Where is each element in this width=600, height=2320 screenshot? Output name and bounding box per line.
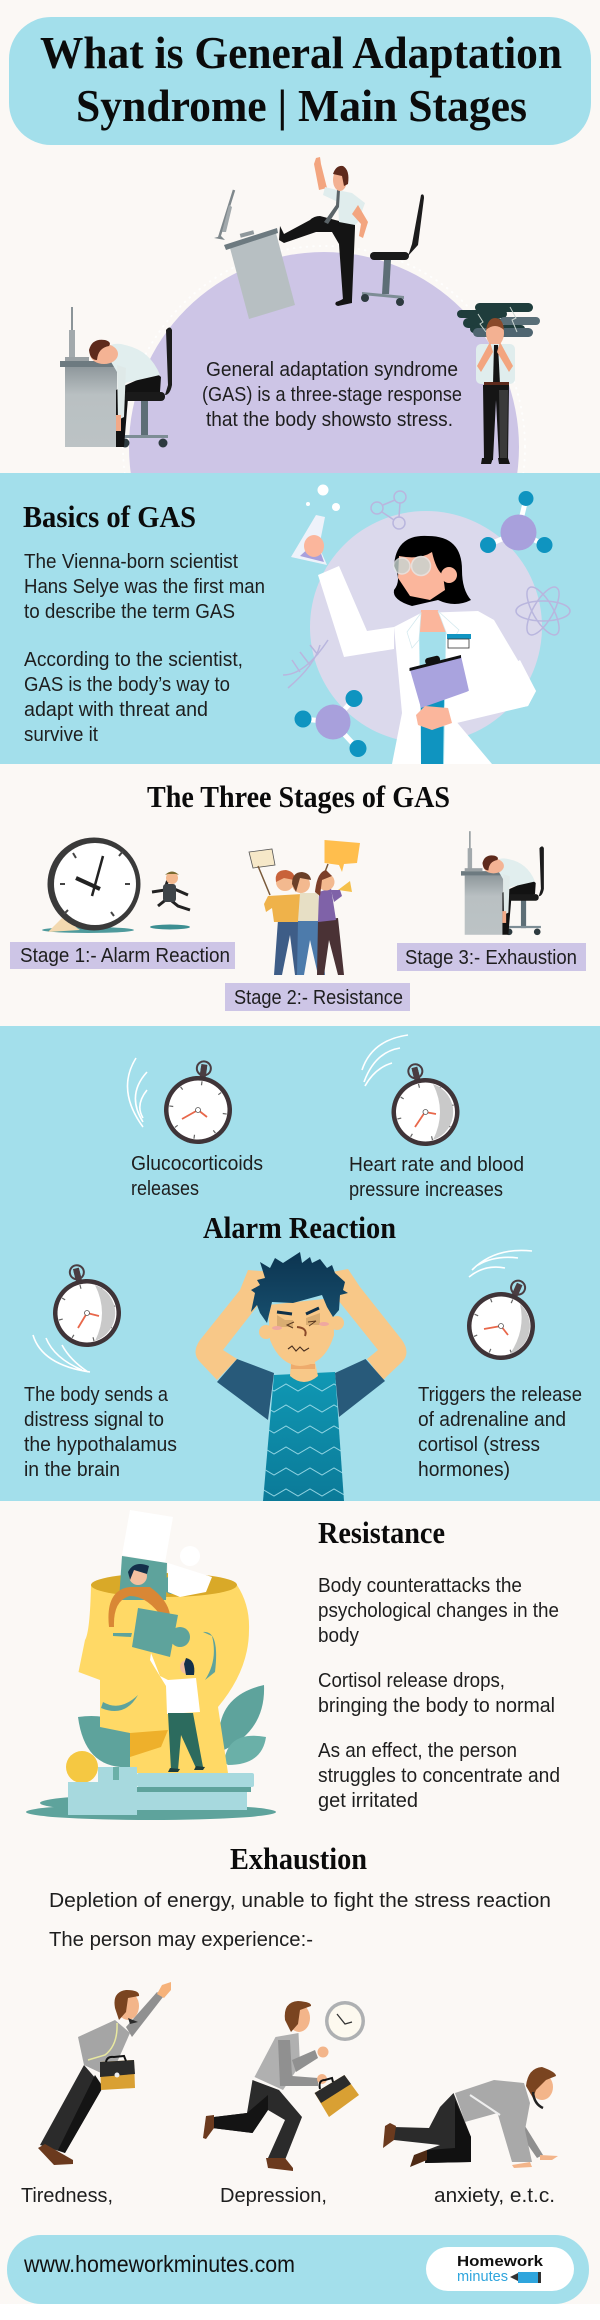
panel: alarm reaction: [0, 1026, 600, 1501]
text: glucocorticoids: releases: [131, 1177, 199, 1200]
logo: minutes: [457, 2268, 508, 2285]
labels: symptoms: anxiety, e.t.c.: [434, 2184, 555, 2207]
illustration: puzzle head: [26, 1510, 276, 1820]
illustration: stressed boy: [196, 1252, 406, 1501]
basics text: The Vienna-born scientist: [24, 550, 238, 573]
text: adrenaline: [418, 1383, 582, 1481]
intro text: [202, 358, 462, 431]
panel: intro: [60, 157, 540, 473]
illustration: exhausted at desk: [461, 831, 544, 935]
text: distress signal: in the brain: [24, 1458, 120, 1481]
heading: resistance: Resistance: [318, 1515, 445, 1550]
logo: [426, 2247, 574, 2291]
resistance text: Body counterattacks the: [318, 1574, 522, 1597]
labels: symptoms: [21, 2184, 555, 2207]
purple semicircle: [129, 252, 519, 473]
text: heart rate: pressure increases: [349, 1178, 503, 1201]
title banner: [9, 17, 591, 145]
intro text: that the body showsto stress.: [206, 408, 453, 431]
text: heart rate: [349, 1153, 524, 1201]
heading: three stages: The Three Stages of GAS: [147, 779, 450, 814]
heading: alarm reaction: Alarm Reaction: [203, 1210, 396, 1245]
resistance text: As an effect, the person: [318, 1739, 517, 1762]
intro text: General adaptation syndrome: [206, 358, 458, 381]
panel: exhaustion: [21, 1841, 558, 2207]
text: glucocorticoids: Glucocorticoids: [131, 1152, 263, 1175]
exhaustion text: The person may experience:-: [49, 1928, 313, 1951]
website url: www.homeworkminutes.com: [23, 2251, 295, 2277]
label: stage 3: Stage 3:- Exhaustion: [405, 946, 577, 969]
basics text: GAS is the body’s way to: [24, 673, 230, 696]
exhaustion text: [49, 1889, 551, 1951]
basics text: [24, 550, 265, 746]
stopwatch 3: [33, 1257, 128, 1372]
heading: exhaustion: Exhaustion: [230, 1841, 367, 1876]
labels: symptoms: Tiredness,: [21, 2184, 113, 2207]
footer banner: [7, 2235, 589, 2304]
resistance text: psychological changes in the: [318, 1599, 559, 1622]
text: glucocorticoids: [131, 1152, 263, 1200]
basics text: to describe the term GAS: [24, 600, 235, 623]
stopwatch 2: [362, 1035, 467, 1153]
resistance text: Cortisol release drops,: [318, 1669, 505, 1692]
text: heart rate: Heart rate and blood: [349, 1153, 524, 1176]
text: adrenaline: of adrenaline and: [418, 1408, 566, 1431]
illustration: scientist: [283, 484, 570, 764]
molecule bottom left: [294, 690, 366, 757]
illustration: protesters: [249, 840, 360, 975]
basics text: survive it: [24, 723, 98, 746]
title text: What is General Adaptation: [40, 27, 562, 78]
text: distress signal: The body sends a: [24, 1383, 169, 1406]
text: distress signal: the hypothalamus: [24, 1433, 177, 1456]
molecule top right: [480, 491, 552, 553]
illustration: man under storm cloud: [457, 303, 540, 464]
resistance text: get irritated: [318, 1789, 418, 1812]
intro text: (GAS) is a three-stage response: [202, 383, 462, 406]
text: adrenaline: Triggers the release: [418, 1383, 582, 1406]
resistance text: body: [318, 1624, 360, 1647]
text: adrenaline: hormones): [418, 1458, 510, 1481]
basics text: adapt with threat and: [24, 698, 208, 721]
heading: basics: Basics of GAS: [23, 499, 196, 534]
illustration: clock and running man: [42, 838, 190, 933]
illustration: tired man reaching: [38, 1982, 171, 2165]
labels: symptoms: Depression,: [220, 2184, 327, 2207]
text: distress signal: distress signal to: [24, 1408, 164, 1431]
panel: basics of GAS: [0, 473, 600, 764]
resistance text: struggles to concentrate and: [318, 1764, 560, 1787]
illustration: man crawling: [383, 2067, 558, 2168]
basics text: According to the scientist,: [24, 648, 243, 671]
title text: Syndrome | Main Stages: [76, 80, 527, 131]
label: stage 1: Stage 1:- Alarm Reaction: [20, 944, 230, 967]
logo: Homework: [457, 2253, 544, 2270]
illustration: man kicking desk: [214, 157, 424, 319]
panel: resistance: [26, 1510, 560, 1820]
label: stage 2: Stage 2:- Resistance: [234, 986, 403, 1009]
resistance text: bringing the body to normal: [318, 1694, 555, 1717]
resistance text: [318, 1574, 560, 1812]
stopwatch 4: [456, 1250, 552, 1371]
text: adrenaline: cortisol (stress: [418, 1433, 540, 1456]
exhaustion text: Depletion of energy, unable to fight the stress reaction: [49, 1889, 551, 1912]
illustration: man asleep at desk: [60, 307, 172, 448]
title text: [40, 27, 562, 131]
panel: the three stages: [10, 779, 586, 1011]
stopwatch 1: [127, 1057, 238, 1148]
basics text: Hans Selye was the first man: [24, 575, 265, 598]
text: distress signal: [24, 1383, 177, 1481]
illustration: man hurrying with clock: [203, 2001, 365, 2171]
